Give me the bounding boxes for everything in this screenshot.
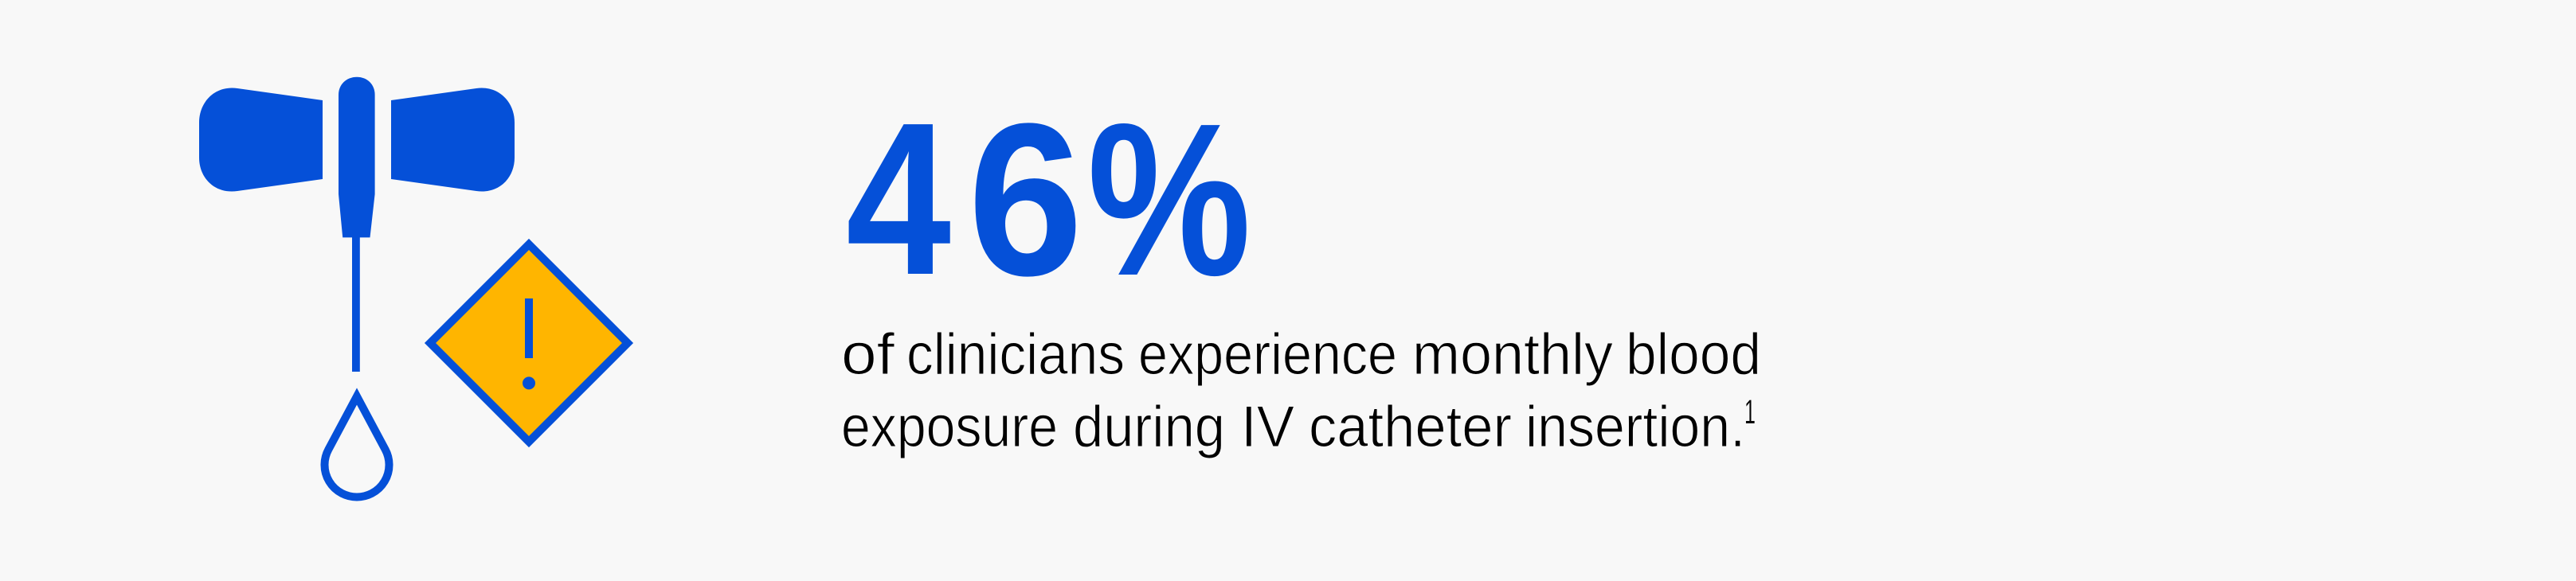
- description line 1: blood: [1626, 322, 1761, 387]
- footnote reference: 1: [1744, 393, 1756, 431]
- description line 2: during: [1073, 395, 1225, 459]
- description line 2: catheter: [1309, 395, 1512, 459]
- icon: catheter handle: [339, 77, 375, 237]
- icon: left catheter wing: [199, 88, 323, 192]
- icon: right catheter wing: [391, 88, 515, 192]
- description line 2: insertion.: [1525, 395, 1745, 459]
- statistic: 46%: [846, 77, 1251, 321]
- description line 1: clinicians: [906, 322, 1125, 387]
- description line 2: exposure: [841, 395, 1058, 459]
- icon: needle: [352, 237, 360, 372]
- icon: blood drop: [325, 396, 389, 497]
- description text: [841, 322, 1761, 459]
- exclamation mark dot: [523, 376, 535, 389]
- description line 1: [841, 322, 1761, 387]
- statistic: 46%: 6: [968, 78, 1083, 321]
- exclamation mark bar: [525, 298, 533, 358]
- description line 2: [841, 395, 1745, 459]
- statistic: 46%: 4: [846, 77, 952, 320]
- icon: IV catheter with blood drop: [199, 77, 515, 497]
- description line 2: IV: [1241, 395, 1294, 459]
- warning diamond shape: [430, 244, 628, 442]
- statistic: 46%: %: [1087, 78, 1251, 321]
- description line 1: monthly: [1412, 322, 1613, 387]
- icon: warning diamond: [430, 244, 628, 442]
- description line 1: of: [841, 322, 895, 387]
- description line 1: experience: [1138, 322, 1397, 387]
